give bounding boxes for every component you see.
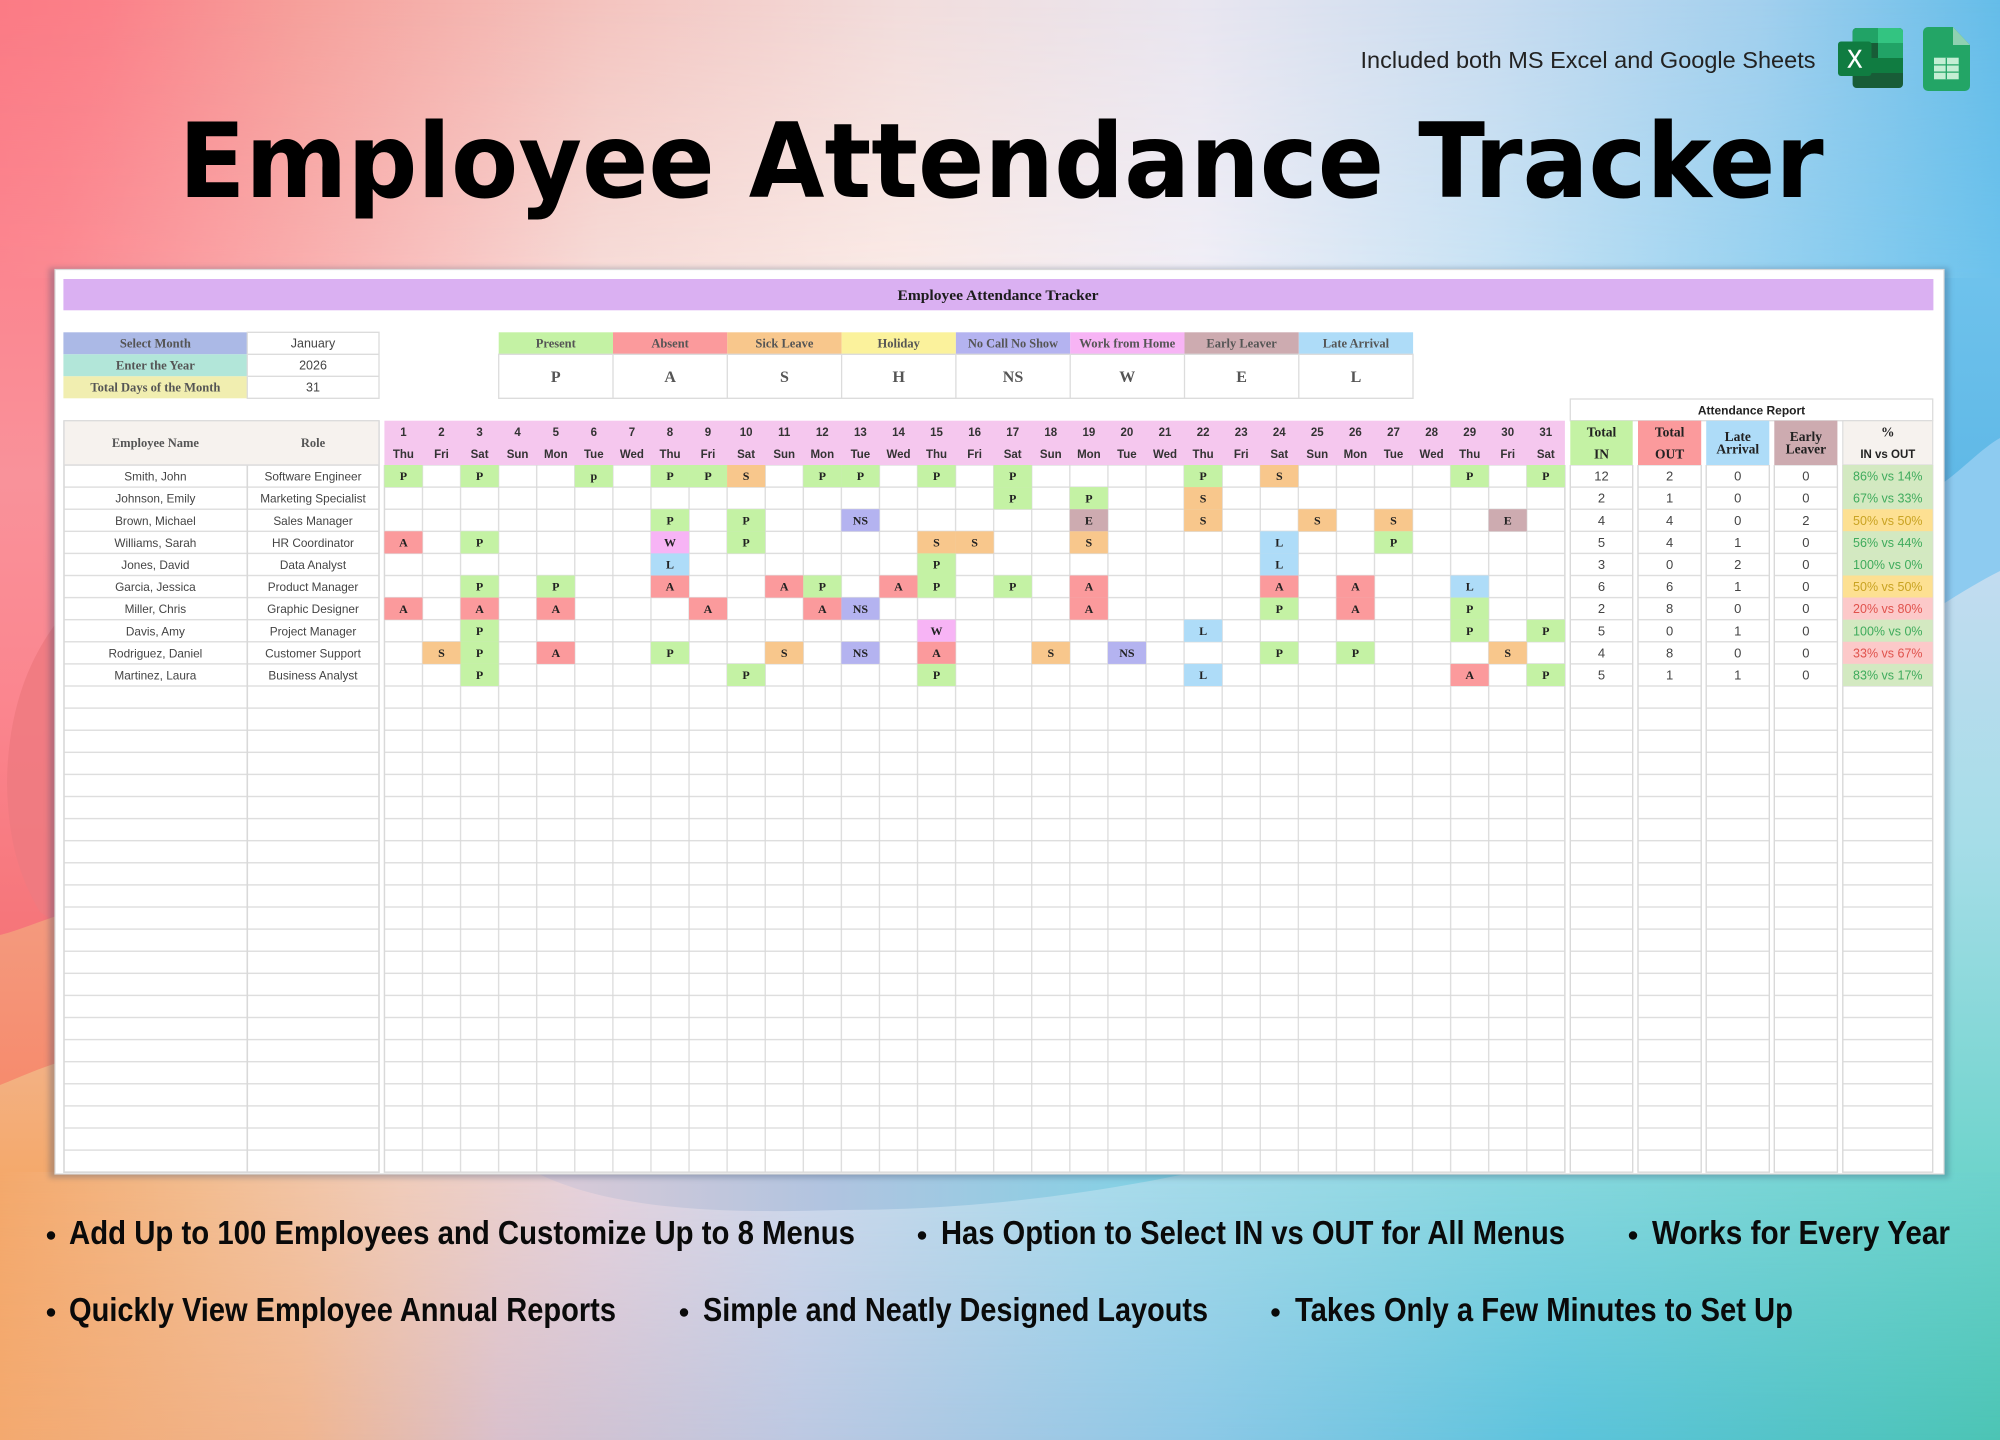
- row: Garcia, Jessica: 1: [1734, 579, 1741, 594]
- day of month header: Tue: [1384, 449, 1403, 461]
- day of month header: 22: [1197, 427, 1209, 439]
- row: Davis, Amy: [126, 620, 1933, 642]
- row: Johnson, Emily: Johnson, Emily: [115, 492, 195, 506]
- day of month header: 7: [629, 427, 635, 439]
- day of month header: 10: [740, 427, 752, 439]
- day of month header: 6: [591, 427, 597, 439]
- day of month header: 4: [514, 427, 521, 439]
- attendance report header: OUT: [1655, 446, 1684, 461]
- row: Garcia, Jessica: A: [666, 580, 675, 594]
- employee and role column headers: Employee Name: [112, 436, 199, 450]
- row: Brown, Michael: [115, 509, 1933, 531]
- feature bullet list: Has Option to Select IN vs OUT for All Menus: [941, 1215, 1565, 1252]
- row: Smith, John: P: [857, 469, 864, 483]
- main title: Employee Attendance Tracker: [179, 102, 1824, 222]
- day of month header: Wed: [1420, 449, 1444, 461]
- day of month header: 26: [1349, 427, 1362, 439]
- row: Davis, Amy: W: [930, 624, 942, 638]
- legend of attendance codes: Work from Home: [1079, 336, 1176, 350]
- day of month header: Thu: [1459, 449, 1480, 461]
- legend of attendance codes: Sick Leave: [755, 336, 814, 350]
- row: Miller, Chris: A: [704, 602, 713, 616]
- legend of attendance codes: Late Arrival: [1323, 336, 1390, 350]
- attendance report header: IN vs OUT: [1860, 449, 1915, 461]
- row: Jones, David: 0: [1802, 557, 1810, 572]
- row: Rodriguez, Daniel: NS: [1119, 646, 1135, 660]
- row: Jones, David: P: [933, 558, 940, 572]
- row: Martinez, Laura: Business Analyst: [268, 669, 358, 683]
- row: Martinez, Laura: P: [933, 668, 940, 682]
- day of month header: 28: [1425, 427, 1439, 439]
- row: Garcia, Jessica: Garcia, Jessica: [115, 580, 196, 594]
- row: Miller, Chris: 8: [1666, 601, 1673, 616]
- feature bullet list: Works for Every Year: [1652, 1215, 1950, 1252]
- day of month header: Sat: [471, 449, 489, 461]
- row: Williams, Sarah: [114, 531, 1933, 553]
- row: Williams, Sarah: P: [742, 535, 750, 549]
- row: Garcia, Jessica: P: [1009, 580, 1016, 594]
- day of month header: Wed: [620, 449, 644, 461]
- row: Miller, Chris: P: [1276, 602, 1283, 616]
- legend of attendance codes: [499, 332, 1413, 398]
- day of month header: 16: [968, 427, 981, 439]
- row: Garcia, Jessica: 6: [1666, 579, 1673, 594]
- row: Brown, Michael: 50% vs 50%: [1853, 514, 1923, 528]
- row: Williams, Sarah: Williams, Sarah: [114, 536, 196, 550]
- row: Smith, John: P: [666, 469, 674, 483]
- attendance report header: Late: [1725, 429, 1751, 444]
- row: Brown, Michael: E: [1504, 513, 1512, 527]
- row: Jones, David: 100% vs 0%: [1853, 558, 1923, 572]
- row: Garcia, Jessica: P: [819, 580, 826, 594]
- row: Williams, Sarah: P: [476, 535, 483, 549]
- day of month header: 1: [400, 427, 407, 439]
- row: Brown, Michael: E: [1085, 513, 1093, 527]
- row: Garcia, Jessica: P: [476, 580, 483, 594]
- attendance report header: [1570, 399, 1933, 465]
- row: Jones, David: L: [1275, 558, 1283, 572]
- legend of attendance codes: A: [664, 369, 676, 386]
- attendance report header: Total: [1655, 424, 1685, 439]
- row: Johnson, Emily: 67% vs 33%: [1853, 492, 1923, 506]
- row: Johnson, Emily: 1: [1666, 491, 1673, 506]
- row: Smith, John: P: [1542, 469, 1549, 483]
- row: Rodriguez, Daniel: S: [438, 646, 445, 660]
- legend of attendance codes: No Call No Show: [968, 336, 1058, 350]
- row: Rodriguez, Daniel: P: [1352, 646, 1359, 660]
- day of month header: Tue: [584, 449, 604, 461]
- day of month header: 30: [1501, 427, 1514, 439]
- attendance report header: IN: [1594, 446, 1609, 461]
- row: Garcia, Jessica: A: [1275, 580, 1284, 594]
- row: Garcia, Jessica: A: [1085, 580, 1094, 594]
- legend of attendance codes: E: [1236, 369, 1247, 386]
- legend of attendance codes: L: [1351, 369, 1361, 386]
- row: Garcia, Jessica: A: [894, 580, 903, 594]
- row: Davis, Amy: P: [1542, 624, 1549, 638]
- settings table: 31: [306, 380, 320, 394]
- day of month header: Sun: [507, 449, 528, 461]
- row: Rodriguez, Daniel: NS: [853, 646, 868, 660]
- row: Williams, Sarah: 5: [1598, 535, 1605, 550]
- day of month header: 21: [1159, 427, 1172, 439]
- row: Martinez, Laura: 83% vs 17%: [1853, 669, 1923, 683]
- row: Miller, Chris: NS: [853, 602, 868, 616]
- legend of attendance codes: W: [1119, 369, 1135, 386]
- row: Davis, Amy: P: [1466, 624, 1473, 638]
- row: Brown, Michael: 0: [1734, 513, 1741, 528]
- feature bullet list: Quickly View Employee Annual Reports: [69, 1292, 616, 1329]
- day of month header: 17: [1006, 427, 1019, 439]
- row: Johnson, Emily: P: [1085, 491, 1093, 505]
- row: Brown, Michael: P: [666, 513, 674, 527]
- row: Rodriguez, Daniel: 8: [1666, 645, 1673, 660]
- row: Garcia, Jessica: 6: [1598, 579, 1605, 594]
- day of month header: Sun: [1040, 449, 1062, 461]
- row: Martinez, Laura: 0: [1802, 668, 1810, 683]
- day of month header: Wed: [886, 449, 911, 461]
- row: Johnson, Emily: P: [1009, 491, 1016, 505]
- row: Williams, Sarah: 56% vs 44%: [1853, 536, 1923, 550]
- icon: Microsoft Excel: X: [1847, 46, 1863, 74]
- row: Williams, Sarah: S: [1086, 535, 1093, 549]
- attendance report header: %: [1881, 424, 1895, 439]
- row: Smith, John: P: [476, 469, 483, 483]
- row: Davis, Amy: 100% vs 0%: [1853, 624, 1923, 638]
- row: Rodriguez, Daniel: P: [666, 646, 674, 660]
- row: Smith, John: Software Engineer: [264, 470, 362, 484]
- day of month header: Mon: [1344, 449, 1367, 461]
- row: Williams, Sarah: 0: [1802, 535, 1810, 550]
- row: Williams, Sarah: 1: [1734, 535, 1741, 550]
- legend of attendance codes: P: [551, 369, 561, 386]
- day of month header: 8: [667, 427, 674, 439]
- row: Davis, Amy: 5: [1598, 623, 1605, 638]
- day of month header: 29: [1463, 427, 1476, 439]
- row: Garcia, Jessica: Product Manager: [268, 580, 358, 594]
- row: Rodriguez, Daniel: Customer Support: [265, 646, 362, 660]
- row: Jones, David: Jones, David: [121, 558, 190, 572]
- attendance report header: Early: [1790, 429, 1822, 444]
- row: Smith, John: 0: [1734, 469, 1741, 484]
- row: Garcia, Jessica: 50% vs 50%: [1853, 580, 1923, 594]
- row: Brown, Michael: Sales Manager: [273, 514, 353, 528]
- day of month header: 18: [1044, 427, 1058, 439]
- row: Smith, John: 12: [1594, 469, 1609, 484]
- row: Garcia, Jessica: P: [933, 580, 940, 594]
- row: Williams, Sarah: A: [399, 535, 408, 549]
- day of month header: Fri: [1500, 449, 1515, 461]
- row: Williams, Sarah: S: [933, 535, 940, 549]
- row: Miller, Chris: 0: [1734, 601, 1741, 616]
- day of month header: Fri: [967, 449, 982, 461]
- row: Rodriguez, Daniel: A: [551, 646, 560, 660]
- row: Williams, Sarah: S: [971, 535, 978, 549]
- row: Martinez, Laura: 5: [1598, 668, 1605, 683]
- row: Smith, John: P: [1199, 469, 1207, 483]
- day of month header: Fri: [701, 449, 715, 461]
- feature bullet list: Takes Only a Few Minutes to Set Up: [1295, 1292, 1793, 1329]
- row: Garcia, Jessica: A: [1351, 580, 1360, 594]
- row: Miller, Chris: A: [399, 602, 408, 616]
- day of month header: Sat: [737, 449, 755, 461]
- feature bullet list: Add Up to 100 Employees and Customize Up to 8 Menus: [69, 1215, 855, 1252]
- day of month header: 27: [1387, 427, 1400, 439]
- row: Smith, John: 86% vs 14%: [1853, 470, 1923, 484]
- row: Smith, John: P: [704, 469, 712, 483]
- row: Rodriguez, Daniel: A: [932, 646, 941, 660]
- day of month header: [384, 421, 1565, 465]
- row: Smith, John: P: [933, 469, 940, 483]
- day of month header: 31: [1539, 427, 1553, 439]
- day of month header: 15: [930, 427, 943, 439]
- row: Rodriguez, Daniel: S: [1504, 646, 1511, 660]
- day of month header: 24: [1273, 427, 1286, 439]
- row: Johnson, Emily: 0: [1802, 491, 1810, 506]
- employee table background grid: [64, 421, 1933, 1172]
- row: Rodriguez, Daniel: Rodriguez, Daniel: [109, 646, 202, 660]
- row: Rodriguez, Daniel: 4: [1598, 645, 1605, 660]
- feature bullet list: Simple and Neatly Designed Layouts: [703, 1292, 1208, 1329]
- row: Rodriguez, Daniel: [109, 642, 1933, 664]
- row: Martinez, Laura: [114, 664, 1933, 686]
- row: Garcia, Jessica: P: [552, 580, 559, 594]
- row: Williams, Sarah: HR Coordinator: [272, 536, 354, 550]
- legend of attendance codes: S: [780, 369, 789, 386]
- row: Brown, Michael: S: [1390, 513, 1397, 527]
- row: Johnson, Emily: Marketing Specialist: [260, 492, 367, 506]
- day of month header: 20: [1121, 427, 1133, 439]
- row: Rodriguez, Daniel: P: [1276, 646, 1283, 660]
- panel: spreadsheet: [49, 268, 1949, 1178]
- row: Martinez, Laura: 1: [1666, 668, 1673, 683]
- row: Davis, Amy: Project Manager: [270, 624, 356, 638]
- day of month header: Fri: [434, 449, 449, 461]
- legend of attendance codes: Holiday: [878, 336, 921, 350]
- row: Rodriguez, Daniel: S: [1047, 646, 1054, 660]
- legend of attendance codes: Early Leaver: [1206, 336, 1277, 350]
- day of month header: 11: [778, 427, 791, 439]
- row: Davis, Amy: P: [476, 624, 483, 638]
- top note: included formats: Included both MS Excel and Google Sheets: [1360, 47, 1816, 73]
- row: Rodriguez, Daniel: 33% vs 67%: [1853, 646, 1923, 660]
- row: Martinez, Laura: P: [1542, 668, 1549, 682]
- legend of attendance codes: NS: [1003, 369, 1023, 386]
- row: Miller, Chris: A: [551, 602, 560, 616]
- row: Johnson, Emily: 0: [1734, 491, 1741, 506]
- row: Davis, Amy: 1: [1734, 623, 1741, 638]
- row: Brown, Michael: 4: [1598, 513, 1605, 528]
- row: Miller, Chris: A: [475, 602, 484, 616]
- row: Johnson, Emily: 2: [1598, 491, 1605, 506]
- row: Miller, Chris: P: [1466, 602, 1473, 616]
- day of month header: Sat: [1270, 449, 1288, 461]
- row: Jones, David: Data Analyst: [280, 558, 347, 572]
- row: Williams, Sarah: 4: [1666, 535, 1673, 550]
- sheet title bar: Employee Attendance Tracker: [898, 288, 1099, 304]
- day of month header: Thu: [659, 449, 681, 461]
- row: Rodriguez, Daniel: P: [476, 646, 483, 660]
- day of month header: 13: [854, 427, 867, 439]
- row: Miller, Chris: A: [1351, 602, 1360, 616]
- employee and role column headers: [64, 421, 379, 465]
- row: Brown, Michael: Brown, Michael: [115, 514, 196, 528]
- row: Miller, Chris: 20% vs 80%: [1853, 602, 1923, 616]
- row: Rodriguez, Daniel: 0: [1802, 645, 1810, 660]
- row: Martinez, Laura: 1: [1734, 668, 1741, 683]
- row: Miller, Chris: 0: [1802, 601, 1810, 616]
- attendance report header: Attendance Report: [1698, 403, 1805, 417]
- row: Smith, John: P: [819, 469, 826, 483]
- settings table: Total Days of the Month: [90, 380, 220, 394]
- day of month header: 12: [816, 427, 829, 439]
- day of month header: 2: [438, 427, 445, 439]
- row: Miller, Chris: A: [1085, 602, 1094, 616]
- settings table: 2026: [299, 358, 327, 372]
- row: Davis, Amy: 0: [1802, 623, 1810, 638]
- row: Smith, John: Smith, John: [124, 470, 187, 484]
- attendance report header: Arrival: [1716, 442, 1759, 456]
- row: Williams, Sarah: W: [664, 535, 676, 549]
- settings table: Enter the Year: [116, 358, 195, 372]
- day of month header: 14: [892, 427, 905, 439]
- row: Brown, Michael: NS: [853, 513, 868, 527]
- row: Miller, Chris: Miller, Chris: [125, 602, 186, 616]
- row: Smith, John: 0: [1802, 469, 1810, 484]
- sheet title bar: [63, 279, 1933, 310]
- row: Rodriguez, Daniel: 0: [1734, 645, 1741, 660]
- day of month header: 19: [1083, 427, 1095, 439]
- day of month header: Thu: [393, 449, 414, 461]
- row: Johnson, Emily: [115, 487, 1933, 509]
- row: Garcia, Jessica: [115, 576, 1933, 598]
- settings table: Select Month: [120, 336, 191, 350]
- row: Smith, John: P: [1009, 469, 1016, 483]
- row: Smith, John: 2: [1666, 469, 1673, 484]
- settings table: January: [291, 336, 336, 350]
- day of month header: Sun: [1306, 449, 1328, 461]
- row: Smith, John: S: [743, 469, 750, 483]
- row: Smith, John: p: [590, 469, 597, 483]
- row: Smith, John: P: [1466, 469, 1473, 483]
- row: Martinez, Laura: A: [1465, 668, 1474, 682]
- row: Martinez, Laura: Martinez, Laura: [114, 669, 197, 683]
- row: Smith, John: [124, 465, 1933, 487]
- legend of attendance codes: Present: [536, 336, 577, 350]
- day of month header: 25: [1311, 427, 1324, 439]
- row: Miller, Chris: 2: [1598, 601, 1605, 616]
- row: Smith, John: S: [1276, 469, 1283, 483]
- day of month header: Sun: [773, 449, 795, 461]
- attendance report header: Total: [1587, 424, 1617, 439]
- row: Jones, David: [121, 553, 1933, 576]
- row: Miller, Chris: Graphic Designer: [267, 602, 359, 616]
- day of month header: Mon: [544, 449, 568, 461]
- row: Miller, Chris: A: [818, 602, 827, 616]
- day of month header: 5: [553, 427, 560, 439]
- row: Brown, Michael: S: [1314, 513, 1321, 527]
- row: Brown, Michael: 4: [1666, 513, 1673, 528]
- row: Williams, Sarah: P: [1390, 535, 1397, 549]
- row: Garcia, Jessica: 0: [1802, 579, 1810, 594]
- day of month header: Sat: [1004, 449, 1022, 461]
- row: Miller, Chris: [125, 598, 1933, 620]
- legend of attendance codes: H: [892, 369, 905, 386]
- row: Jones, David: 3: [1598, 557, 1605, 572]
- day of month header: 9: [705, 427, 711, 439]
- row: Jones, David: L: [666, 558, 674, 572]
- row: Smith, John: P: [400, 469, 407, 483]
- day of month header: Sat: [1537, 449, 1555, 461]
- employee and role column headers: Role: [301, 436, 326, 450]
- row: Brown, Michael: 2: [1802, 513, 1810, 528]
- row: Brown, Michael: S: [1200, 513, 1207, 527]
- day of month header: Tue: [1117, 449, 1137, 461]
- row: Jones, David: 2: [1734, 557, 1741, 572]
- row: Martinez, Laura: P: [742, 668, 750, 682]
- row: Davis, Amy: L: [1199, 624, 1207, 638]
- day of month header: Tue: [851, 449, 870, 461]
- icon: Microsoft Excel: [1838, 28, 1903, 88]
- day of month header: Fri: [1234, 449, 1249, 461]
- attendance report header: Leaver: [1786, 442, 1826, 456]
- feature bullet list: [47, 1215, 1950, 1329]
- row: Davis, Amy: Davis, Amy: [126, 624, 185, 638]
- row: Davis, Amy: 0: [1666, 623, 1673, 638]
- row: Martinez, Laura: L: [1199, 668, 1207, 682]
- day of month header: Thu: [1193, 449, 1214, 461]
- row: Brown, Michael: P: [742, 513, 750, 527]
- day of month header: Wed: [1153, 449, 1177, 461]
- row: Jones, David: 0: [1666, 557, 1673, 572]
- day of month header: 23: [1235, 427, 1248, 439]
- legend of attendance codes: Absent: [651, 336, 690, 350]
- icon: Google Sheets: [1923, 27, 1970, 91]
- row: Martinez, Laura: P: [476, 668, 483, 682]
- row: Williams, Sarah: L: [1275, 535, 1283, 549]
- day of month header: 3: [476, 427, 483, 439]
- row: Garcia, Jessica: A: [780, 580, 789, 594]
- day of month header: Mon: [810, 449, 834, 461]
- settings table: [63, 332, 379, 398]
- day of month header: Mon: [1077, 449, 1101, 461]
- row: Rodriguez, Daniel: S: [781, 646, 788, 660]
- row: Garcia, Jessica: L: [1466, 580, 1474, 594]
- day of month header: Thu: [926, 449, 947, 461]
- background wave under sheet: [535, 1172, 1195, 1211]
- row: Johnson, Emily: S: [1200, 491, 1207, 505]
